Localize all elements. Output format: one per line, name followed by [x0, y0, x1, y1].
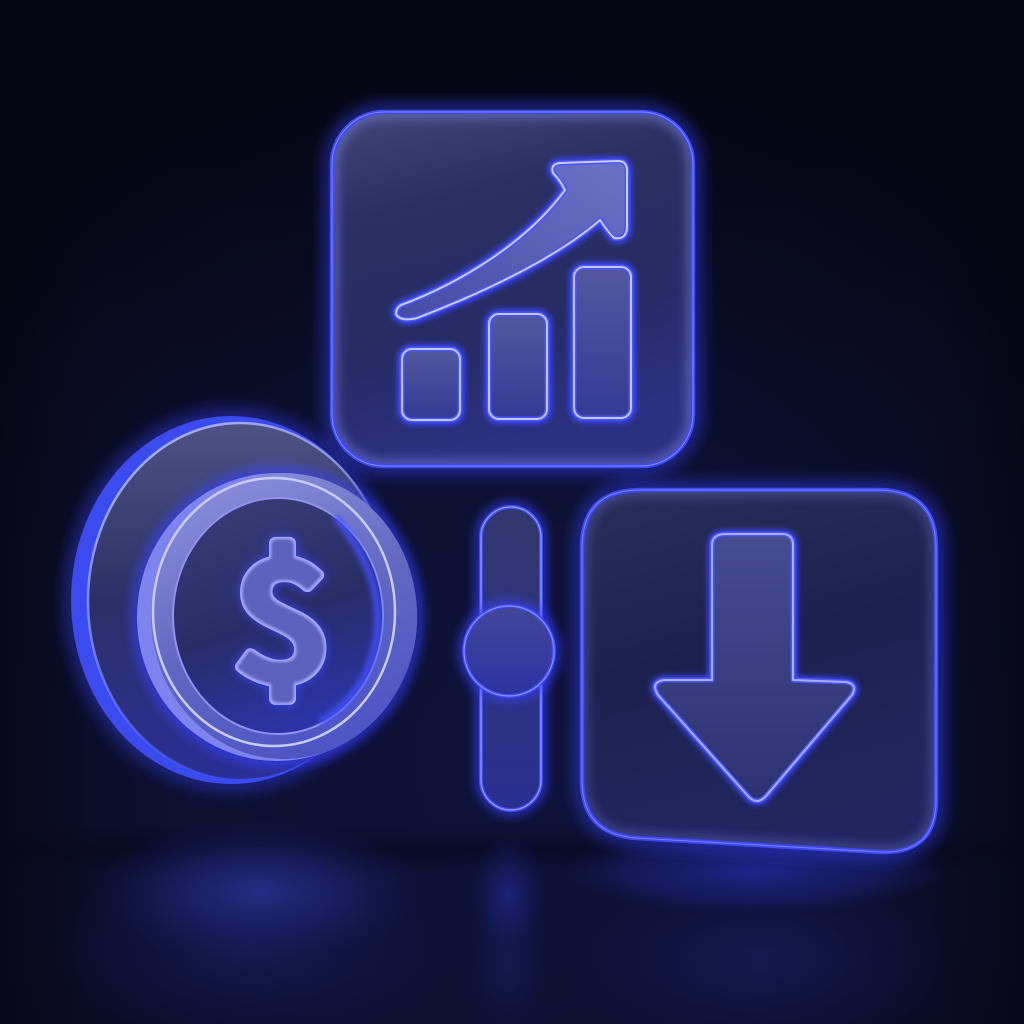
slider track [481, 507, 541, 810]
panel: rising chart card [332, 112, 693, 466]
coin inner face [173, 498, 383, 734]
icon: growth arrow [396, 161, 627, 319]
coin front disc [137, 473, 417, 761]
bar medium [489, 314, 547, 419]
coin back disc [71, 416, 392, 784]
slider knob [464, 606, 554, 696]
bar tall [574, 267, 631, 418]
slider [464, 507, 554, 810]
floor reflection [0, 820, 1024, 1024]
coin with dollar sign [71, 416, 417, 784]
dollar sign: $ [232, 491, 332, 726]
bar small [402, 349, 460, 420]
panel: down arrow card [582, 490, 936, 852]
icon: down arrow [655, 534, 854, 801]
bar chart [402, 267, 631, 420]
